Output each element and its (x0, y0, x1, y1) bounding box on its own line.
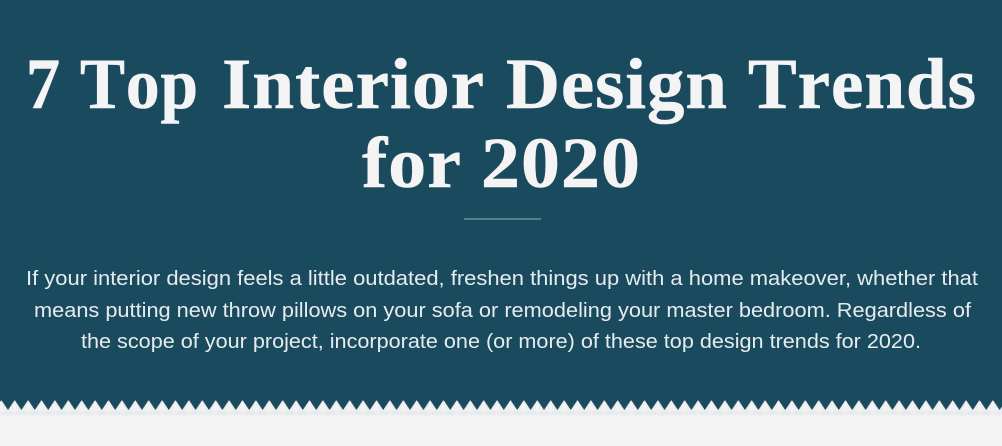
title: 2020 (481, 123, 641, 203)
title: Trends (748, 44, 977, 124)
title: 7 (26, 44, 61, 124)
divider under title (464, 218, 541, 220)
intro text block: If your interior design feels a little outdated, freshen things up with a home makeover, whether that (26, 267, 978, 290)
intro text block (26, 267, 978, 353)
title: Design (506, 44, 728, 124)
intro text block: the scope of your project, incorporate one (or more) of these top design trends for 2020. (81, 330, 921, 353)
title (26, 44, 977, 203)
title: Interior (222, 44, 485, 124)
title: Top (80, 44, 199, 124)
intro text block: means putting new throw pillows on your sofa or remodeling your master bedroom. Regardless of (34, 299, 971, 322)
title: for (362, 123, 462, 203)
